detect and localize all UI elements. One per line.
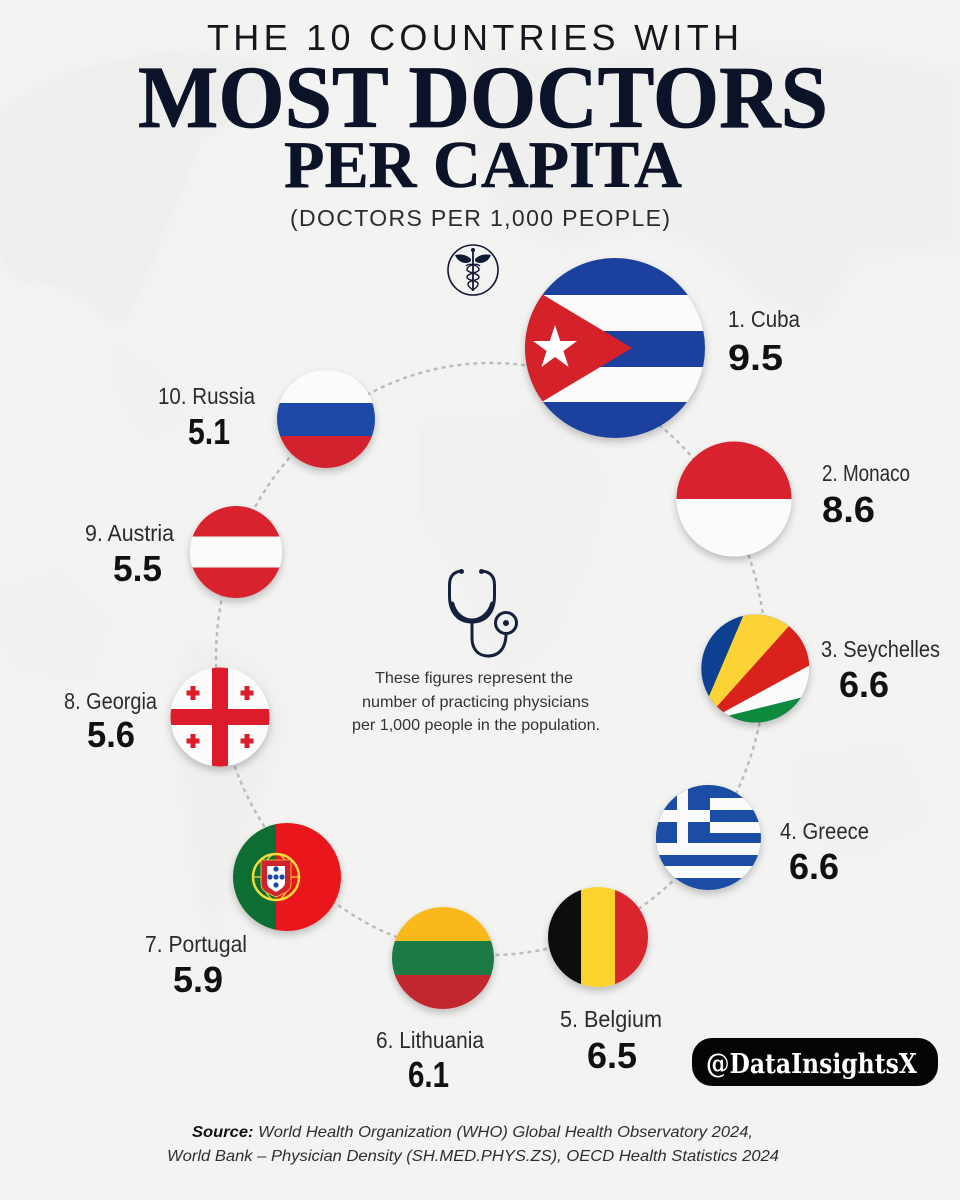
- label: Greece: 4. Greece: [780, 818, 869, 844]
- label: Cuba: 9.5: [728, 337, 783, 378]
- label: Georgia: 5.6: [87, 714, 135, 755]
- label: Seychelles: [821, 636, 940, 705]
- center explanation text: number of practicing physicians: [362, 694, 589, 711]
- title: second line: PER CAPITA: [284, 128, 682, 202]
- icon: caduceus: [448, 245, 498, 295]
- label: Cuba: [728, 306, 800, 378]
- label: Monaco: [822, 460, 910, 530]
- center explanation text: [352, 670, 600, 734]
- source note: World Bank – Physician Density (SH.MED.PHYS.ZS), OECD Health Statistics 2024: [167, 1148, 779, 1165]
- center explanation text: These figures represent the: [375, 670, 573, 687]
- label: Monaco: 8.6: [822, 489, 875, 530]
- label: Russia: 10. Russia: [158, 383, 255, 409]
- flag: Georgia: [165, 662, 275, 772]
- label: Cuba: 1. Cuba: [728, 306, 800, 332]
- label: Greece: [780, 818, 869, 887]
- label: Portugal: 5.9: [173, 959, 223, 1000]
- label: Russia: [158, 383, 255, 452]
- label: Seychelles: 3. Seychelles: [821, 636, 940, 662]
- label: Lithuania: 6. Lithuania: [376, 1027, 484, 1053]
- label: Russia: 5.1: [188, 411, 230, 452]
- label: Austria: 9. Austria: [85, 520, 174, 546]
- label: Georgia: 8. Georgia: [64, 688, 157, 714]
- icon: stethoscope: [450, 569, 516, 656]
- label: Portugal: [145, 931, 247, 1000]
- title: kicker: THE 10 COUNTRIES WITH: [207, 17, 739, 58]
- label: Austria: [85, 520, 174, 589]
- label: Belgium: 6.5: [587, 1035, 637, 1076]
- title: main line: MOST DOCTORS: [138, 49, 828, 147]
- flag: Portugal: [230, 820, 346, 935]
- source note: [167, 1124, 779, 1165]
- label: Monaco: 2. Monaco: [822, 460, 910, 486]
- source note: Source: World Health Organization (WHO) Global Health Observatory 2024,: [192, 1124, 753, 1141]
- badge: handle: [692, 1038, 938, 1086]
- flag: Seychelles: [698, 614, 813, 730]
- flag: Greece: [650, 780, 770, 895]
- subtitle: (DOCTORS PER 1,000 PEOPLE): [290, 205, 670, 231]
- label: Greece: 6.6: [789, 846, 839, 887]
- flag: Austria: [185, 500, 287, 604]
- flag: Belgium: [545, 885, 651, 990]
- faint world map: [0, 40, 960, 945]
- label: Austria: 5.5: [113, 548, 162, 589]
- flag: Monaco: [670, 440, 800, 559]
- flag: Cuba: [500, 255, 710, 441]
- badge: handle: @DataInsightsX: [706, 1049, 917, 1080]
- label: Belgium: 5. Belgium: [560, 1006, 662, 1032]
- label: Lithuania: 6.1: [408, 1054, 449, 1095]
- label: Georgia: [64, 688, 157, 755]
- label: Seychelles: 6.6: [839, 664, 889, 705]
- dashed ring connecting flags: [216, 363, 766, 955]
- center explanation text: per 1,000 people in the population.: [352, 717, 600, 734]
- label: Belgium: [560, 1006, 662, 1076]
- label: Portugal: 7. Portugal: [145, 931, 247, 957]
- flag: Russia: [270, 365, 382, 474]
- label: Lithuania: [376, 1027, 484, 1095]
- flag: Lithuania: [390, 905, 496, 1011]
